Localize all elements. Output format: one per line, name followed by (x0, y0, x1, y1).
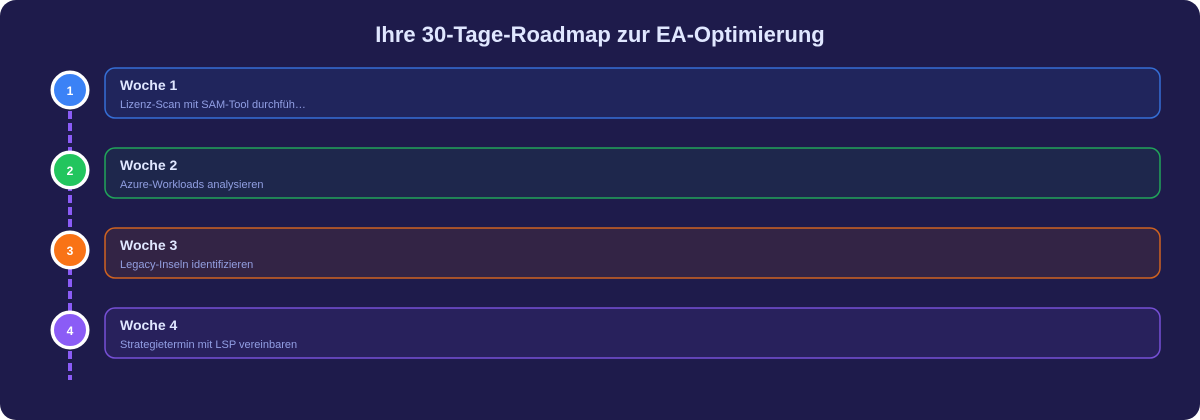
badge: 1: 1 (67, 84, 74, 98)
timeline dashed connector (68, 75, 72, 380)
badge: 4 (52, 312, 88, 348)
description: Woche 1: Lizenz-Scan mit SAM-Tool durchfüh… (120, 99, 306, 111)
heading: Woche 3: Woche 3 (120, 237, 178, 253)
card: Woche 1 (105, 68, 1160, 118)
card: Woche 4 (105, 308, 1160, 358)
title: Ihre 30-Tage-Roadmap zur EA-Optimierung (375, 22, 825, 47)
badge: 2: 2 (67, 164, 74, 178)
description: Woche 2: Azure-Workloads analysieren (120, 179, 263, 191)
step 3: Woche 3 (52, 228, 1160, 278)
card: Woche 3 (105, 228, 1160, 278)
description: Woche 3: Legacy-Inseln identifizieren (120, 259, 253, 271)
card: Woche 2 (105, 148, 1160, 198)
step 1: Woche 1 (52, 68, 1160, 118)
heading: Woche 2: Woche 2 (120, 157, 178, 173)
step 4: Woche 4 (52, 308, 1160, 358)
badge: 4: 4 (67, 324, 74, 338)
description: Woche 4: Strategietermin mit LSP vereinbaren (120, 339, 297, 351)
heading: Woche 1: Woche 1 (120, 77, 178, 93)
badge: 3: 3 (67, 244, 74, 258)
badge: 2 (52, 152, 88, 188)
step 2: Woche 2 (52, 148, 1160, 198)
badge: 1 (52, 72, 88, 108)
heading: Woche 4: Woche 4 (120, 317, 178, 333)
badge: 3 (52, 232, 88, 268)
